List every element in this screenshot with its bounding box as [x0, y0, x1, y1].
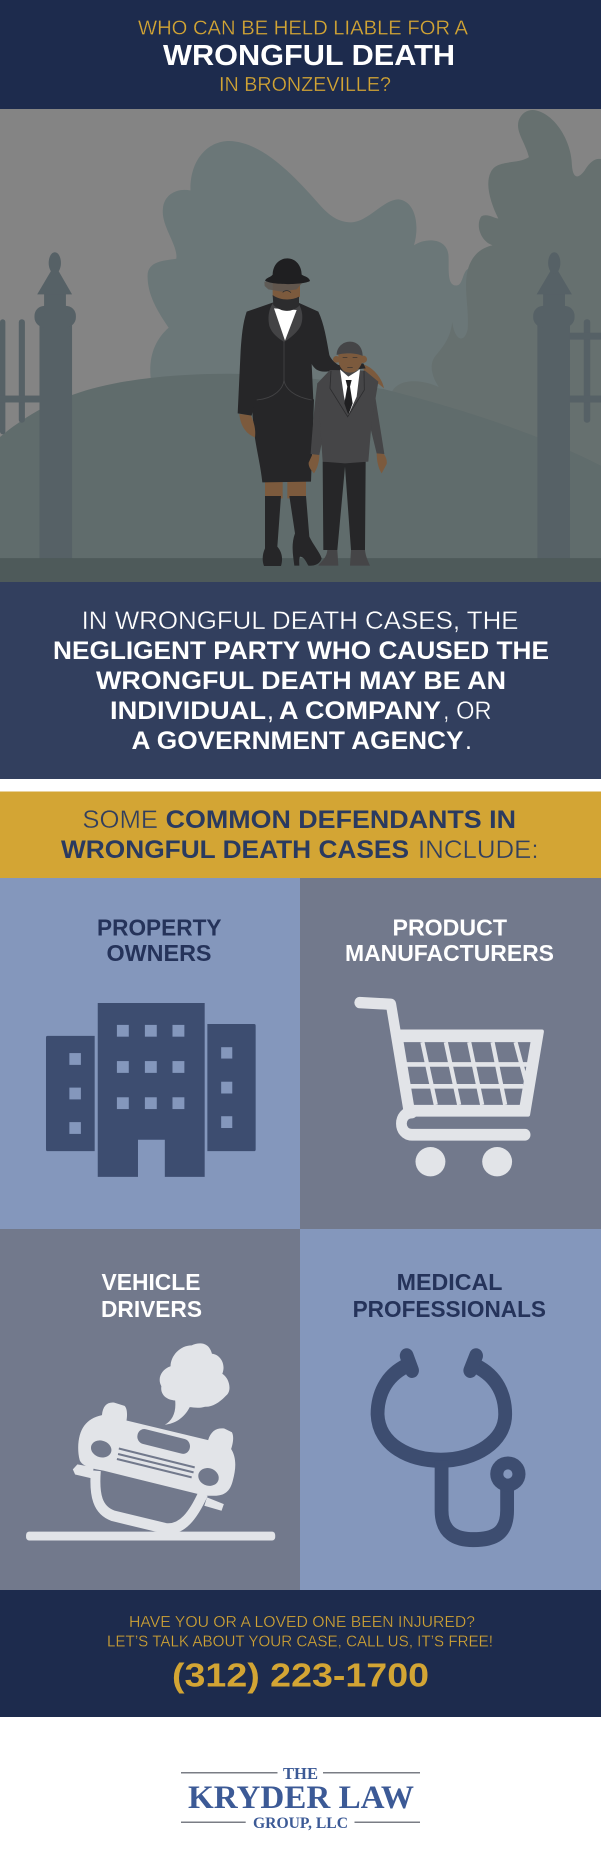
panel: vehicle drivers — [0, 1229, 300, 1590]
logo: The Kryder Law Group, LLC: GROUP, LLC — [253, 1815, 348, 1832]
call-to-action text — [107, 1614, 493, 1650]
statement line 5: A GOVERNMENT AGENCY — [132, 727, 464, 755]
statement line 5: . — [465, 727, 472, 755]
woman jacket and arm — [238, 303, 366, 416]
woman skirt — [252, 399, 314, 482]
heading line 1: SOME — [82, 806, 158, 834]
headlights — [89, 1438, 113, 1460]
boy shirt — [340, 369, 360, 415]
right gate post — [533, 252, 575, 560]
statement line 4: A COMPANY — [279, 697, 441, 725]
illustration: cemetery gate background — [0, 103, 601, 583]
title — [101, 1269, 202, 1322]
woman blouse — [274, 308, 297, 341]
panel: medical professionals — [300, 1229, 601, 1590]
title: PRODUCT — [392, 914, 507, 940]
boy arms — [311, 383, 384, 455]
boy tie — [344, 380, 353, 415]
hill — [0, 374, 601, 563]
woman neck and scarf — [273, 283, 300, 302]
panel: property owners — [0, 878, 300, 1229]
boy face — [333, 356, 340, 363]
boy jacket — [317, 370, 378, 463]
phone number: (312) 223-1700 — [172, 1656, 429, 1694]
boy trousers — [323, 462, 366, 550]
icon: overturned car with smoke — [26, 1343, 275, 1540]
heading line 2: WRONGFUL DEATH — [163, 40, 455, 72]
title — [353, 1269, 546, 1322]
title: PROFESSIONALS — [353, 1296, 546, 1322]
figures: mourning woman and boy — [238, 258, 387, 566]
woman hand on shoulder — [363, 364, 384, 388]
smoke — [160, 1343, 229, 1425]
tree left — [148, 141, 498, 422]
woman left hand — [239, 414, 255, 437]
heading line 2: WRONGFUL DEATH CASES — [61, 836, 409, 864]
call-to-action text: HAVE YOU OR A LOVED ONE BEEN INJURED? — [129, 1614, 475, 1631]
grille — [117, 1449, 195, 1477]
right fence — [567, 319, 601, 423]
boy shoes — [318, 550, 370, 566]
boy hair — [337, 342, 363, 356]
boy lapels — [330, 371, 364, 417]
panel: defendants heading — [0, 792, 601, 878]
heading line 2 — [61, 836, 538, 864]
slot — [136, 1428, 191, 1455]
call-to-action text: LET’S TALK ABOUT YOUR CASE, CALL US, IT’S FREE! — [107, 1634, 493, 1650]
cabin — [95, 1471, 203, 1529]
statement line 4: , — [267, 697, 274, 725]
logo: The Kryder Law Group, LLC: KRYDER LAW — [188, 1780, 414, 1816]
statement line 4: , OR — [443, 697, 492, 725]
road — [26, 1532, 275, 1540]
heading line 2: INCLUDE: — [418, 836, 538, 864]
heading line 1: COMMON DEFENDANTS IN — [166, 806, 516, 834]
icon: buildings — [46, 1003, 256, 1177]
car body — [78, 1402, 235, 1496]
panel: call to action — [0, 1590, 601, 1717]
boy — [309, 342, 387, 566]
woman legs — [265, 481, 306, 498]
ground — [0, 558, 601, 583]
left fence — [0, 319, 42, 434]
logo: The Kryder Law Group, LLC — [181, 1764, 420, 1832]
title: MANUFACTURERS — [345, 940, 554, 966]
statement line 4 — [110, 697, 492, 725]
boy hands — [309, 452, 387, 473]
left gate post — [34, 252, 76, 560]
title: OWNERS — [106, 940, 212, 966]
title: PROPERTY — [97, 914, 222, 940]
veil — [264, 282, 303, 292]
title — [97, 914, 222, 966]
icon: shopping cart — [360, 1003, 542, 1176]
statement line 1: IN WRONGFUL DEATH CASES, THE — [82, 607, 519, 635]
logo: The Kryder Law Group, LLC: THE — [283, 1764, 318, 1783]
heading line 1: WHO CAN BE HELD LIABLE FOR A — [138, 18, 469, 40]
statement line 4: INDIVIDUAL — [110, 697, 266, 725]
bumpers — [73, 1464, 224, 1511]
icon: stethoscope — [378, 1356, 526, 1540]
statement line 2: NEGLIGENT PARTY WHO CAUSED THE — [53, 637, 549, 665]
panel: product manufacturers — [300, 878, 601, 1229]
woman lapels — [268, 303, 302, 342]
panel: intro statement — [0, 582, 601, 779]
woman boots — [263, 496, 322, 566]
tree right — [391, 110, 601, 479]
hat — [265, 258, 310, 284]
header panel — [0, 0, 601, 109]
statement line 3: WRONGFUL DEATH MAY BE AN — [96, 667, 506, 695]
woman — [238, 258, 384, 566]
title: MEDICAL — [397, 1269, 503, 1295]
title: DRIVERS — [101, 1296, 202, 1322]
title — [345, 914, 554, 966]
title: VEHICLE — [102, 1269, 200, 1295]
heading line 3: IN BRONZEVILLE? — [219, 74, 391, 96]
